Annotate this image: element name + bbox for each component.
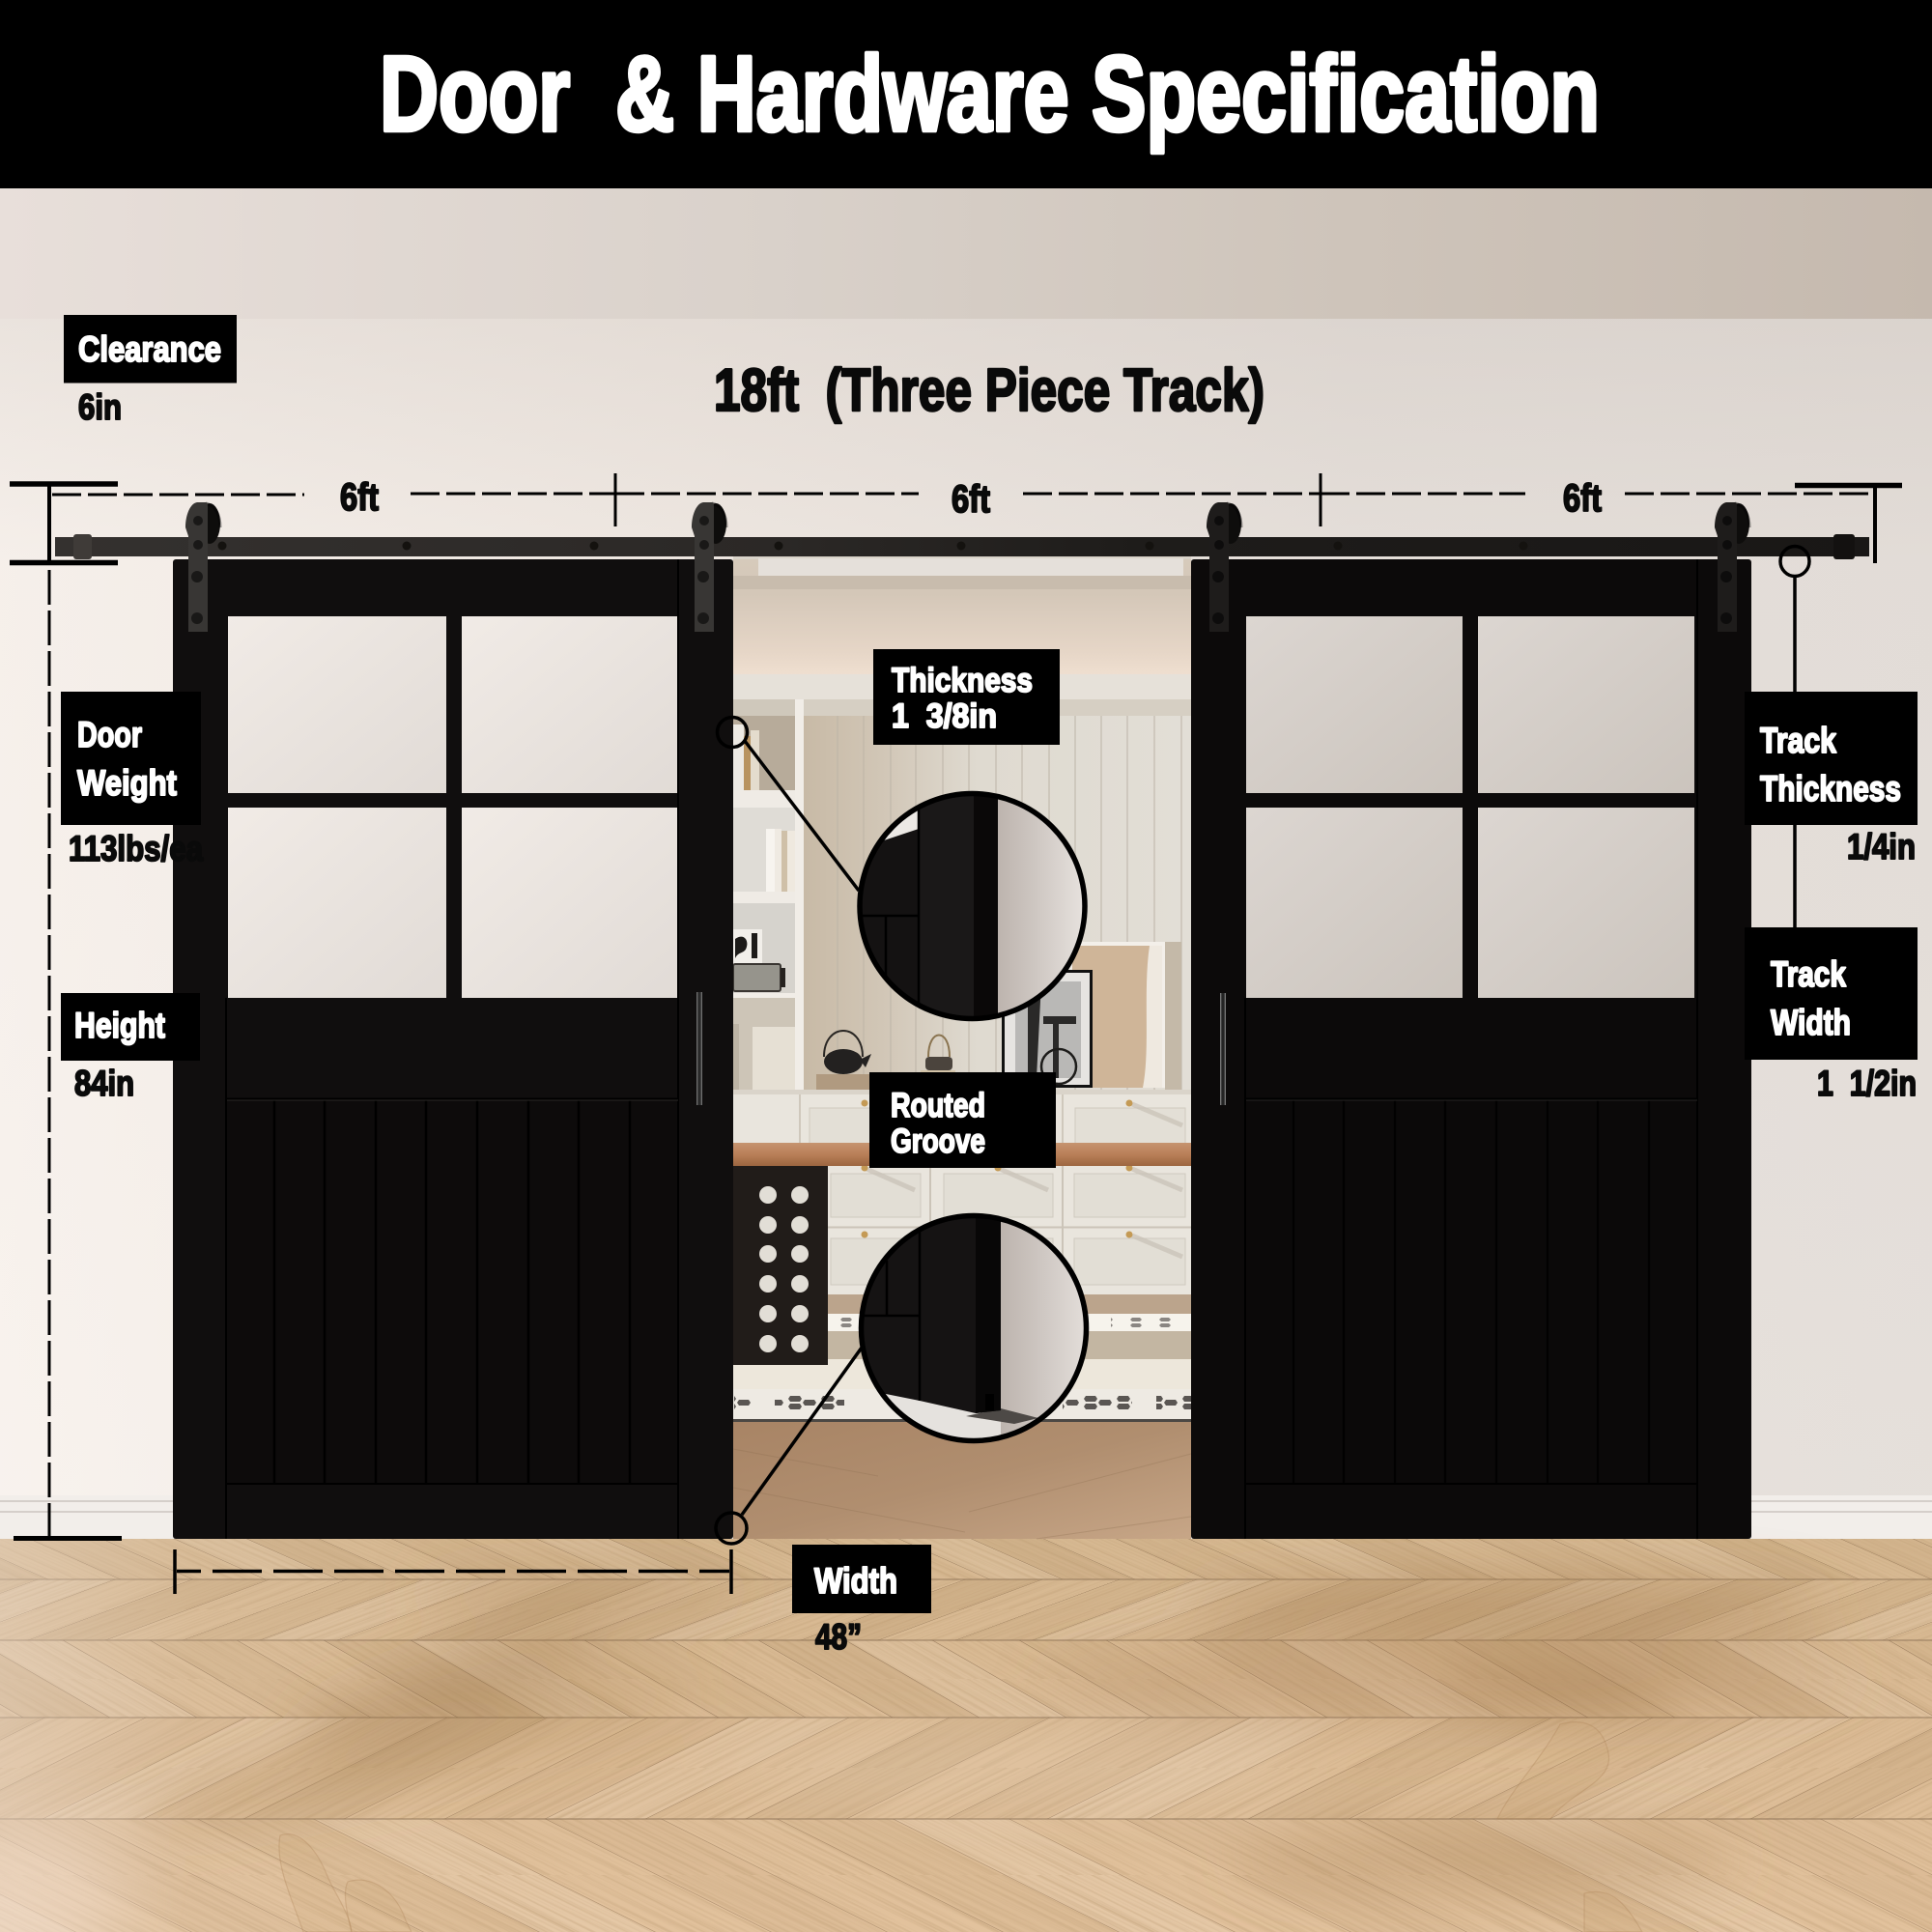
right door xyxy=(1191,559,1751,1539)
callout: track width: Width xyxy=(1771,1003,1851,1042)
title bar xyxy=(0,0,1932,188)
callout: clearance: Clearance xyxy=(78,329,221,369)
section label 6ft middle: 6ft xyxy=(952,478,990,521)
leader ring and line to groove magnifier xyxy=(716,1348,862,1544)
callout: thickness: 1 3/8in xyxy=(892,697,997,735)
ceiling xyxy=(0,188,1932,319)
interior framed pictures xyxy=(1002,942,1181,1090)
callout: track width xyxy=(1745,927,1918,1103)
callout: track thickness xyxy=(1745,692,1918,867)
track end stop left xyxy=(73,534,92,559)
callout: width: Width xyxy=(814,1561,897,1601)
callout: height xyxy=(61,993,200,1103)
track length heading: 18ft (Three Piece Track) xyxy=(714,357,1264,424)
hangers on right door xyxy=(1207,502,1749,632)
interior black perforated box xyxy=(733,1166,828,1365)
callout: routed groove: Routed xyxy=(891,1087,985,1124)
callout: track width: Track xyxy=(1771,954,1846,994)
right door handle xyxy=(1220,993,1226,1105)
callout: clearance xyxy=(64,315,237,427)
callout: routed groove xyxy=(869,1072,1056,1168)
leader ring and line to thickness magnifier xyxy=(717,717,859,891)
callout: height: 84in xyxy=(74,1064,134,1103)
callout: track thickness: Thickness xyxy=(1760,769,1901,809)
interior floor and rug xyxy=(733,1294,1191,1539)
track end stop right xyxy=(1833,534,1855,559)
left door handle xyxy=(696,992,702,1105)
clearance dimension marker xyxy=(10,484,118,1538)
height baseline bar xyxy=(14,1536,122,1541)
callout: door weight: 113lbs/ea xyxy=(69,829,203,868)
interior crown molding xyxy=(733,674,1191,699)
title: Door & Hardware Specification xyxy=(380,35,1600,154)
callout: door weight xyxy=(61,692,203,868)
door width dimension xyxy=(175,1549,731,1594)
interior shelving and books xyxy=(733,699,795,1090)
left door xyxy=(173,559,733,1539)
callout: track thickness: 1/4in xyxy=(1847,827,1916,867)
interior ceiling soffit xyxy=(733,558,1191,675)
section label 6ft left: 6ft xyxy=(340,476,379,519)
magnifier: door thickness detail xyxy=(855,787,1087,1024)
herringbone wood floor xyxy=(0,1539,1932,1932)
barn door track rail xyxy=(55,534,1869,559)
track callout leader line and ring xyxy=(1780,547,1809,927)
callout: height: Height xyxy=(74,1006,165,1045)
hangers on left door xyxy=(185,502,726,632)
interior paneled wall xyxy=(795,699,1191,1090)
magnifier: routed groove detail xyxy=(855,1208,1096,1444)
callout: routed groove: Groove xyxy=(891,1122,985,1160)
callout: width xyxy=(792,1545,931,1657)
interior cabinets xyxy=(733,1090,1191,1294)
right track end marker xyxy=(1795,485,1902,563)
left door plank panel xyxy=(226,559,678,1539)
callout: clearance: 6in xyxy=(78,387,122,427)
interior room seen through the opening xyxy=(733,556,1191,1539)
right door plank panel xyxy=(1245,559,1697,1539)
track section dimension lines xyxy=(52,473,1875,526)
wood grain figures xyxy=(279,1722,1642,1932)
right door glass panes xyxy=(1246,616,1694,998)
interior teapots and tray xyxy=(816,1031,955,1090)
wall background xyxy=(0,319,1932,1539)
callout: width: 48” xyxy=(815,1617,862,1657)
callout: door weight: Door xyxy=(77,715,142,754)
section label 6ft right: 6ft xyxy=(1563,477,1602,520)
callout: thickness xyxy=(873,649,1060,745)
callout: track thickness: Track xyxy=(1760,721,1836,760)
interior wood counter xyxy=(733,1143,1191,1166)
callout: thickness: Thickness xyxy=(892,662,1033,699)
callout: door weight: Weight xyxy=(77,763,177,803)
left door glass panes xyxy=(228,616,677,998)
